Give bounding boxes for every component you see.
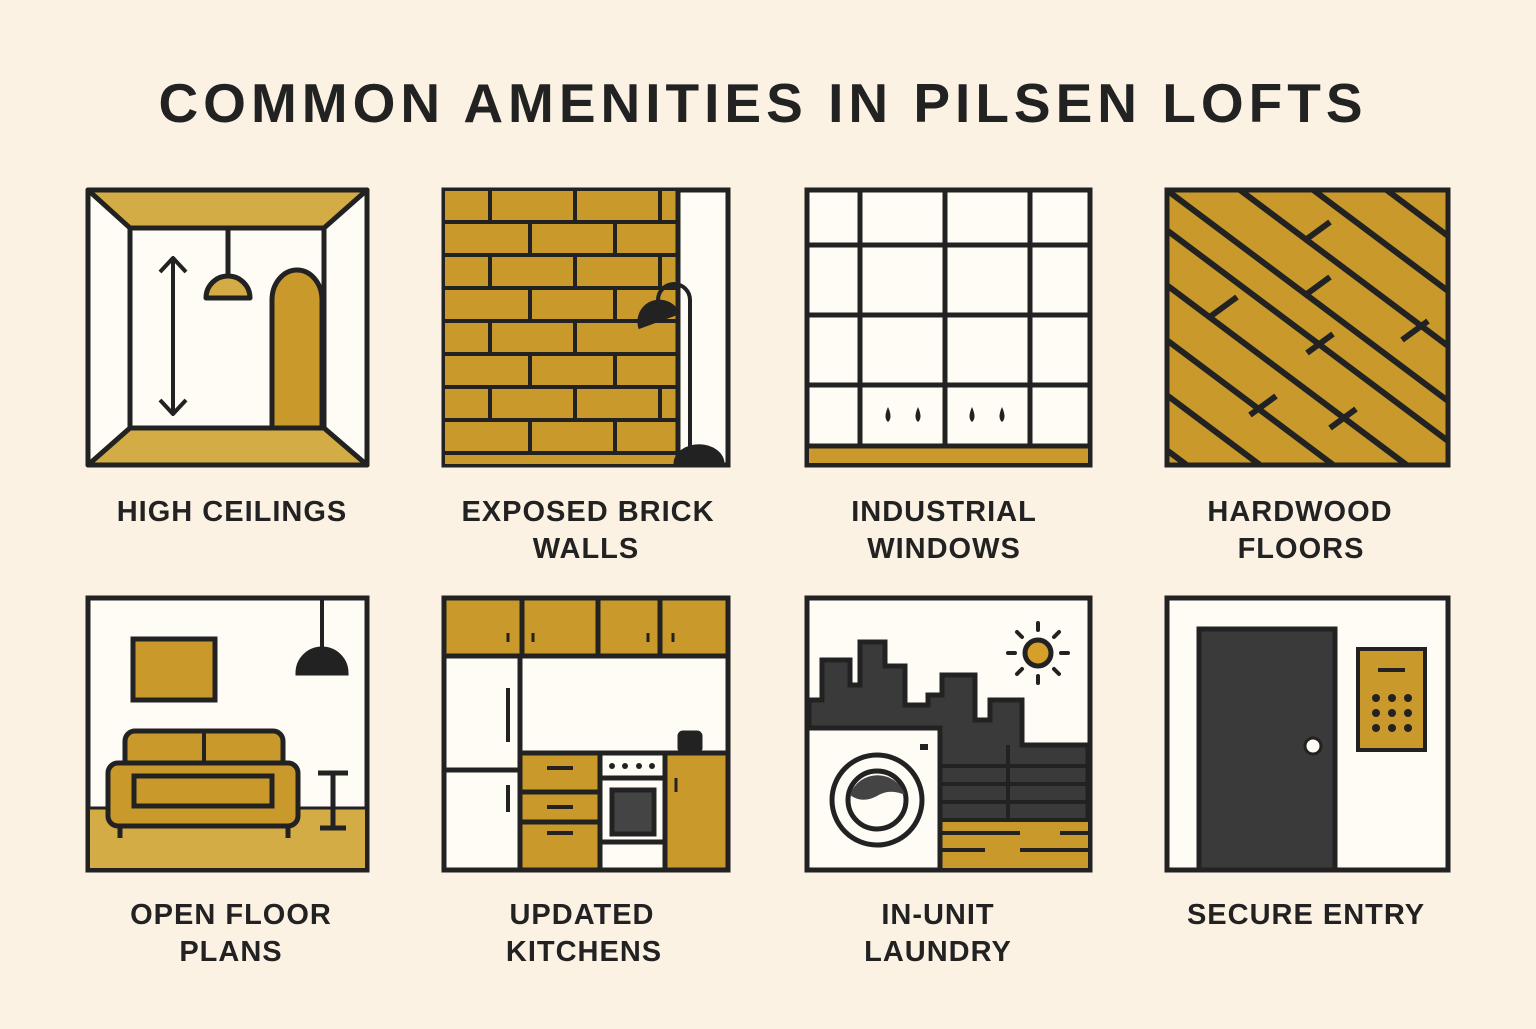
label: in-unit laundry: IN-UNIT: [881, 899, 995, 931]
label: open floor plans: OPEN FLOOR: [130, 899, 332, 931]
label: exposed brick: [461, 496, 715, 565]
panel: secure entry: [1167, 598, 1448, 870]
title: COMMON AMENITIES IN PILSEN LOFTS: [158, 72, 1368, 134]
label: industrial windows: WINDOWS: [867, 533, 1021, 565]
panel: industrial windows: [807, 190, 1090, 465]
panel: high ceilings: [88, 190, 367, 465]
panel: hardwood floors: [1164, 188, 1450, 468]
label: updated kitchens: [506, 899, 662, 968]
label: updated kitchens: KITCHENS: [506, 936, 662, 968]
label: industrial windows: [851, 496, 1037, 565]
label: open floor plans: [130, 899, 332, 968]
label: in-unit laundry: [864, 899, 1012, 968]
panel: exposed brick: [440, 190, 728, 465]
label: exposed brick: EXPOSED BRICK: [461, 496, 715, 528]
label: hardwood floors: FLOORS: [1238, 533, 1364, 565]
label: hardwood floors: [1207, 496, 1393, 565]
panel: in-unit laundry: [807, 598, 1090, 870]
label: secure entry: SECURE ENTRY: [1187, 899, 1425, 931]
label: hardwood floors: HARDWOOD: [1207, 496, 1393, 528]
panel: open floor plans: [88, 598, 367, 870]
panel: updated kitchens: [444, 598, 728, 870]
label: exposed brick: WALLS: [533, 533, 639, 565]
label: open floor plans: PLANS: [179, 936, 283, 968]
label: in-unit laundry: LAUNDRY: [864, 936, 1012, 968]
label: updated kitchens: UPDATED: [509, 899, 655, 931]
label: industrial windows: INDUSTRIAL: [851, 496, 1037, 528]
label: high ceilings: HIGH CEILINGS: [117, 496, 347, 528]
